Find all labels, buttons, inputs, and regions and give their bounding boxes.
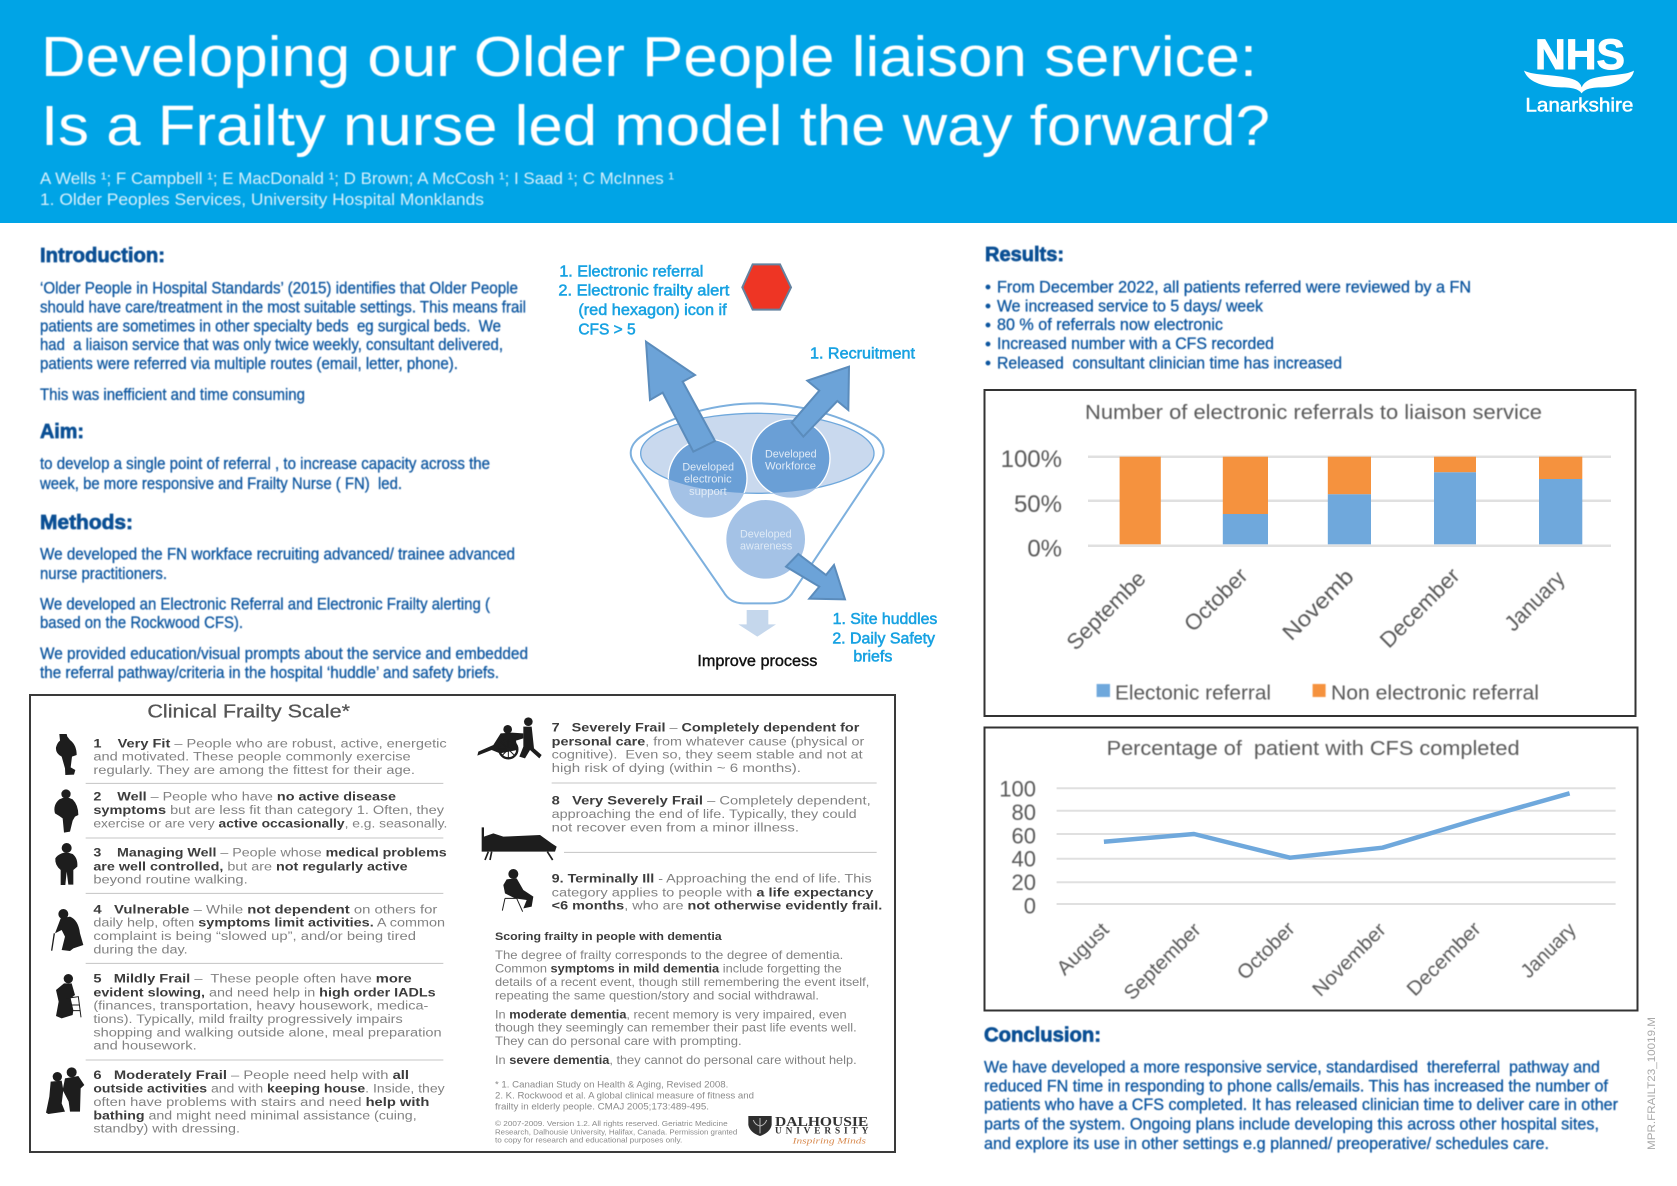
copyright notice: to copy for research and educational purposes only.	[495, 1136, 682, 1145]
methods section	[40, 512, 528, 682]
item 8: very severely frail	[482, 793, 871, 860]
label: site huddles list: 1. Site huddles	[833, 611, 938, 628]
aim text: week, be more responsive and Frailty Nurse ( FN) led.	[39, 475, 402, 493]
aim text	[39, 455, 490, 493]
references: 2. K. Rockwood et al. A global clinical measure of fitness and	[495, 1091, 754, 1101]
introduction text: should have care/treatment in the most suitable settings. This means frail	[40, 298, 526, 316]
item 6: moderately frail	[46, 1067, 446, 1136]
results bullet list: We increased service to 5 days/ week	[997, 297, 1264, 315]
conclusion text	[984, 1058, 1618, 1153]
y axis labels	[999, 777, 1036, 918]
item 6: moderately frail: often have problems with stairs and need help with	[93, 1095, 429, 1109]
title: Developing our Older People liaison service:	[41, 25, 1257, 89]
x axis labels: Septembe	[1061, 566, 1151, 655]
y axis labels: 0%	[1027, 536, 1062, 563]
y axis labels: 80	[1012, 800, 1036, 825]
legend: Non electronic referral	[1331, 682, 1539, 704]
funnel diagram	[558, 264, 938, 670]
authors and affiliation: 1. Older Peoples Services, University Hospital Monklands	[40, 190, 484, 209]
scoring frailty in dementia: In severe dementia , they cannot do personal care without help.	[495, 1054, 857, 1067]
item 1: very fit: and motivated. These people commonly exercise	[93, 750, 411, 764]
introduction section	[40, 245, 526, 404]
item 6: moderately frail: bathing and might need minimal assistance (cuing,	[93, 1108, 417, 1122]
x axis labels: December	[1375, 563, 1465, 653]
conclusion text: and explore its use in other settings e.g planned/ preoperative/ schedules care.	[984, 1135, 1549, 1153]
label: electronic referral list	[558, 264, 730, 338]
NHS Lanarkshire logo	[1524, 31, 1634, 117]
heading: clinical frailty scale: Clinical Frailty Scale*	[147, 700, 350, 721]
item 2: well: 2 Well – People who have no active disease	[93, 790, 396, 804]
circle: developed awareness: awareness	[740, 540, 793, 552]
heading: methods: Methods:	[40, 512, 133, 534]
Dalhousie University logo	[748, 1115, 869, 1145]
results bullet list	[986, 278, 1471, 372]
heading: conclusion: Conclusion:	[984, 1025, 1101, 1047]
scoring frailty in dementia	[495, 931, 869, 1067]
left column of frailty scale	[46, 700, 447, 1136]
arrow: to recruitment	[792, 367, 849, 437]
item 2: well: symptoms but are less fit than category 1. Often, they	[93, 803, 445, 817]
introduction text: had a liaison service that was only twice weekly, consultant delivered,	[40, 336, 503, 354]
item 1: very fit	[56, 734, 447, 777]
aim section	[39, 421, 490, 493]
item 9: terminally ill: 9. Terminally Ill - Approaching the end of life. This	[552, 872, 872, 886]
references: frailty in elderly people. CMAJ 2005;173:489-495.	[495, 1101, 709, 1111]
item 4: vulnerable: complaint is being “slowed up”, and/or being tired	[93, 929, 416, 943]
label: electronic referral list: (red hexagon) icon if	[578, 302, 727, 319]
authors and affiliation: A Wells ¹; F Campbell ¹; E MacDonald ¹; D Brown; A McCosh ¹; I Saad ¹; C McInnes ¹	[40, 169, 674, 188]
scoring frailty in dementia: They can do personal care with prompting.	[495, 1035, 742, 1048]
chart title: Percentage of patient with CFS completed	[1107, 738, 1520, 760]
NHS Lanarkshire logo: Lanarkshire	[1525, 96, 1633, 117]
x axis labels: October	[1233, 918, 1300, 984]
panel: stacked bar chart of electronic referrals	[984, 390, 1636, 716]
icon: red hexagon	[742, 264, 791, 310]
right column of frailty scale	[477, 717, 882, 1145]
item 3: managing well: are well controlled, but are not regularly active	[93, 859, 408, 873]
title	[41, 25, 1270, 158]
item 5: mildly frail: 5 Mildly Frail – These people often have more	[93, 972, 412, 986]
item 3: managing well	[55, 843, 447, 887]
circle: developed electronic support	[668, 439, 747, 518]
item 8: very severely frail: approaching the end of life. Typically, they could	[552, 807, 857, 821]
title: Is a Frailty nurse led model the way forward?	[41, 94, 1270, 158]
label: improve process: Improve process	[697, 653, 818, 670]
scoring frailty in dementia: Scoring frailty in people with dementia	[495, 931, 723, 943]
x axis labels: September	[1120, 919, 1206, 1005]
authors and affiliation	[40, 169, 674, 209]
item 1: very fit: regularly. They are among the fittest for their age.	[93, 763, 415, 777]
x axis labels: November	[1309, 919, 1391, 1001]
Dalhousie University logo: UNIVERSITY	[775, 1127, 869, 1137]
methods text: based on the Rockwood CFS).	[40, 614, 243, 632]
label: site huddles list: 2. Daily Safety	[832, 630, 935, 647]
x axis labels	[1061, 563, 1570, 655]
x axis labels: October	[1179, 563, 1253, 636]
heading: introduction: Introduction:	[40, 245, 165, 267]
x axis labels: January	[1500, 566, 1570, 636]
item 7: severely frail	[477, 717, 864, 775]
x axis labels: Novemb	[1277, 564, 1359, 645]
scoring frailty in dementia: In moderate dementia , recent memory is very impaired, even	[495, 1008, 847, 1021]
item 7: severely frail: personal care , from whatever cause (physical or	[552, 734, 864, 748]
scoring frailty in dementia: though they seemingly can remember their past life events well.	[495, 1021, 857, 1034]
methods text: nurse practitioners.	[40, 565, 167, 583]
results bullet list: 80 % of referrals now electronic	[997, 316, 1223, 334]
item 4: vulnerable: 4 Vulnerable – While not dependent on others for	[93, 902, 437, 916]
results bullet list: Increased number with a CFS recorded	[997, 335, 1274, 353]
introduction text: ‘Older People in Hospital Standards’ (2015) identifies that Older People	[40, 279, 518, 297]
item 2: well	[54, 789, 447, 833]
item 5: mildly frail: evident slowing, and need help in high order IADLs	[93, 985, 436, 999]
introduction text: patients were referred via multiple routes (email, letter, phone).	[40, 355, 458, 373]
item 8: very severely frail: not recover even from a minor illness.	[552, 820, 799, 834]
x axis labels: December	[1403, 918, 1486, 1001]
methods text: the referral pathway/criteria in the hospital ‘huddle’ and safety briefs.	[40, 664, 499, 682]
y axis labels: 60	[1012, 823, 1036, 848]
circle: developed awareness: Developed	[740, 528, 792, 540]
circle: developed electronic support: electronic	[684, 473, 732, 485]
circle: developed awareness	[726, 500, 805, 579]
references	[495, 1080, 754, 1111]
conclusion text: patients who have a CFS completed. It has released clinician time to deliver care in other	[984, 1096, 1618, 1114]
introduction text	[40, 279, 526, 404]
item 9: terminally ill: category applies to people with a life expectancy	[552, 885, 873, 899]
scoring frailty in dementia: details of a recent event, though still remembering the event itself,	[495, 976, 869, 989]
item 4: vulnerable	[52, 902, 445, 956]
scoring frailty in dementia: The degree of frailty corresponds to the degree of dementia.	[495, 949, 843, 962]
copyright notice: © 2007-2009. Version 1.2. All rights reserved. Geriatric Medicine	[495, 1119, 728, 1128]
y axis labels	[1001, 446, 1062, 563]
aim text: to develop a single point of referral , to increase capacity across the	[40, 455, 490, 473]
methods text: We developed the FN workface recruiting advanced/ trainee advanced	[40, 546, 515, 564]
label: site huddles list	[832, 611, 938, 666]
arrow: funnel output	[738, 610, 776, 637]
scoring frailty in dementia: repeating the same question/story and social withdrawal.	[495, 989, 819, 1002]
panel: clinical frailty scale	[30, 695, 895, 1152]
label: electronic referral list: 1. Electronic referral	[559, 264, 703, 281]
conclusion text: reduced FN time in responding to phone calls/emails. This has increased the number of	[984, 1077, 1608, 1095]
reference code: MPR.FRAILT23_10019.M	[1646, 1017, 1658, 1150]
item 5: mildly frail: tions). Typically, mild frailty progressively impairs	[93, 1012, 403, 1026]
circle: developed electronic support: support	[689, 486, 727, 498]
x axis labels	[1053, 918, 1581, 1005]
item 5: mildly frail	[56, 972, 442, 1053]
data line	[1104, 793, 1570, 858]
arrow: to site huddles	[786, 554, 845, 599]
item 8: very severely frail: 8 Very Severely Frail – Completely dependent,	[552, 793, 871, 807]
chart title: Number of electronic referrals to liaison service	[1085, 402, 1542, 424]
item 6: moderately frail: 6 Moderately Frail – People need help with all	[93, 1068, 409, 1082]
y axis labels: 0	[1024, 893, 1036, 918]
arrow: to electronic referral	[646, 342, 715, 452]
funnel mouth ellipse	[641, 413, 874, 493]
x axis labels: January	[1517, 919, 1581, 983]
circle: developed electronic support: Developed	[682, 462, 734, 474]
introduction text: patients are sometimes in other specialty beds eg surgical beds. We	[40, 317, 501, 335]
methods text: We developed an Electronic Referral and Electronic Frailty alerting (	[40, 596, 490, 614]
item 3: managing well: beyond routine walking.	[93, 873, 248, 887]
results bullet list: Released consultant clinician time has increased	[997, 354, 1342, 372]
item 9: terminally ill	[502, 869, 882, 912]
heading: results: Results:	[985, 244, 1064, 266]
item 1: very fit: 1 Very Fit – People who are robust, active, energetic	[93, 736, 447, 750]
x axis labels: August	[1053, 919, 1114, 980]
circle: developed workforce	[751, 419, 830, 498]
conclusion text: We have developed a more responsive service, standardised thereferral pathway and	[984, 1058, 1600, 1076]
methods text	[40, 546, 528, 682]
y axis labels: 100	[999, 777, 1036, 802]
item 6: moderately frail: standby) with dressing.	[93, 1122, 240, 1136]
item 4: vulnerable: during the day.	[93, 942, 188, 956]
item 5: mildly frail: and housework.	[93, 1039, 197, 1053]
references: * 1. Canadian Study on Health & Aging, Revised 2008.	[495, 1080, 728, 1090]
introduction text: This was inefficient and time consuming	[40, 386, 305, 404]
conclusion section	[984, 1025, 1618, 1153]
legend: Electonic referral	[1115, 682, 1271, 704]
results bullet list: From December 2022, all patients referred were reviewed by a FN	[997, 278, 1471, 296]
copyright notice	[495, 1119, 737, 1145]
item 7: severely frail: cognitive). Even so, they seem stable and not at	[552, 748, 863, 762]
y axis labels: 50%	[1014, 491, 1062, 518]
y axis labels: 20	[1012, 870, 1036, 895]
bars	[1120, 457, 1582, 544]
panel: line chart of CFS completion	[984, 728, 1638, 1010]
Dalhousie University logo: DALHOUSIE	[775, 1115, 868, 1130]
y axis labels: 40	[1012, 847, 1036, 872]
label: site huddles list: briefs	[853, 649, 893, 666]
NHS Lanarkshire logo: NHS	[1535, 31, 1625, 79]
scoring frailty in dementia: Common symptoms in mild dementia include forgetting the	[495, 963, 842, 976]
conclusion text: parts of the system. Ongoing plans include developing this across other hospital sites,	[984, 1115, 1599, 1133]
Dalhousie University logo: Inspiring Minds	[791, 1136, 866, 1145]
item 5: mildly frail: shopping and walking outside alone, meal preparation	[93, 1025, 442, 1039]
item 2: well: exercise or are very active occasionally , e.g. seasonally.	[93, 816, 447, 830]
heading: aim: Aim:	[40, 421, 84, 443]
label: electronic referral list: 2. Electronic frailty alert	[558, 283, 730, 300]
item 4: vulnerable: daily help, often symptoms limit activities. A common	[93, 916, 445, 930]
y axis labels: 100%	[1001, 446, 1062, 473]
item 9: terminally ill: <6 months , who are not otherwise evidently frail.	[552, 898, 882, 912]
label: recruitment: 1. Recruitment	[810, 345, 916, 362]
item 3: managing well: 3 Managing Well – People whose medical problems	[93, 846, 447, 860]
funnel outline	[631, 403, 884, 603]
header banner	[0, 0, 1677, 223]
item 7: severely frail: 7 Severely Frail – Completely dependent for	[552, 721, 860, 735]
results section	[985, 244, 1471, 372]
circle: developed workforce: Developed	[765, 448, 817, 460]
methods text: We provided education/visual prompts about the service and embedded	[40, 645, 528, 663]
item 6: moderately frail: outside activities and with keeping house . Inside, they	[93, 1082, 446, 1096]
copyright notice: Research, Dalhousie University, Halifax, Canada. Permission granted	[495, 1127, 737, 1136]
label: electronic referral list: CFS > 5	[578, 321, 636, 338]
legend	[1097, 682, 1539, 704]
item 7: severely frail: high risk of dying (within ~ 6 months).	[552, 761, 801, 775]
item 5: mildly frail: (finances, transportation, heavy housework, medica-	[93, 999, 428, 1013]
circle: developed workforce: Workforce	[765, 460, 816, 472]
